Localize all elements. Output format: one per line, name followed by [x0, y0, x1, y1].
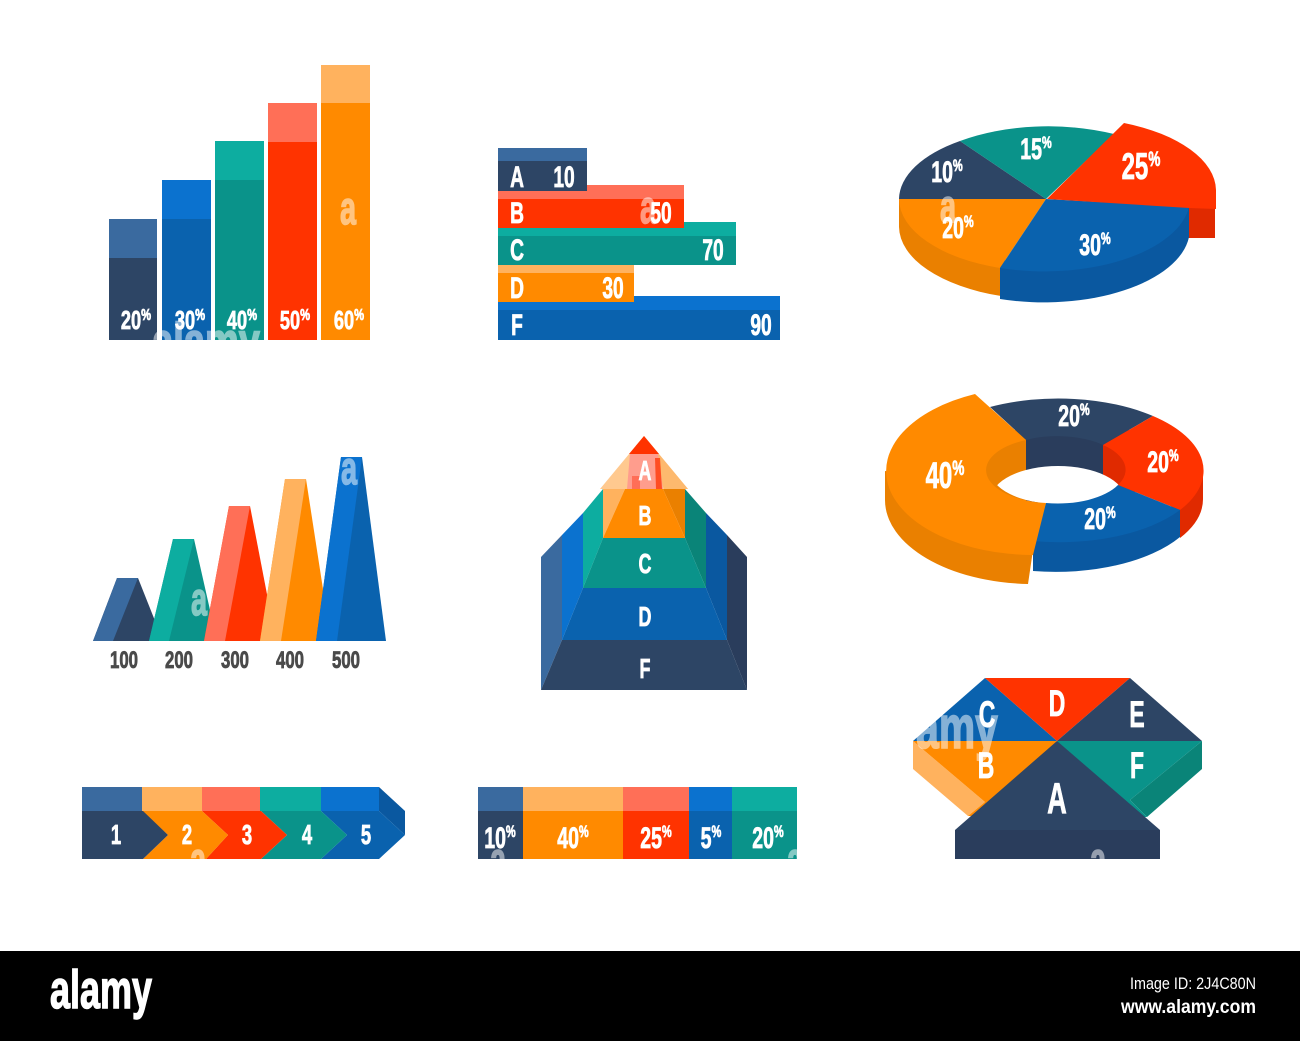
bar B 50: B — [510, 197, 524, 230]
right side face — [1130, 741, 1202, 817]
segment C — [913, 678, 1057, 741]
orange slice side — [899, 199, 1001, 296]
bar A 10: 10 — [553, 161, 575, 194]
orange segment 40% — [886, 394, 1046, 555]
panel: 3D donut chart — [885, 394, 1204, 584]
segment 25% — [623, 787, 689, 859]
bar A 10 — [498, 148, 587, 194]
bar value labels: 40 — [227, 306, 247, 335]
orange segment side — [885, 471, 1033, 584]
pyramid labels: C — [639, 548, 651, 579]
segment A — [955, 741, 1160, 830]
axis labels: 200 — [165, 647, 193, 674]
pie labels: % — [1042, 134, 1052, 153]
left side face — [913, 741, 985, 816]
bar B 50: a — [640, 182, 656, 234]
bar C 70 — [498, 222, 736, 267]
hexagon labels — [978, 682, 1145, 886]
segment 10%: % — [506, 823, 516, 842]
column 400 — [260, 479, 331, 641]
red segment 20% — [1103, 416, 1204, 510]
bar D 30: D — [510, 272, 524, 305]
segment 40% — [523, 787, 623, 859]
blue slice side — [1000, 203, 1189, 302]
column 500 — [316, 457, 386, 641]
website: www.alamy.com — [1120, 997, 1256, 1018]
chevron 1 — [82, 811, 168, 859]
chevron numbers: 5 — [361, 820, 371, 851]
pie labels: 25 — [1122, 146, 1148, 187]
tier C — [583, 489, 706, 588]
watermark on bars — [152, 183, 356, 369]
axis labels: 100 — [110, 647, 138, 674]
panel: 3D pie chart — [899, 123, 1216, 302]
pie labels: % — [964, 213, 974, 232]
watermark on hexagon: amy — [916, 694, 998, 761]
bar 30% — [162, 180, 211, 340]
axis labels: 400 — [276, 647, 304, 674]
bar C 70: C — [510, 234, 524, 267]
bar value labels — [121, 305, 364, 335]
pyramid labels: D — [639, 601, 651, 632]
donut labels: 40 — [926, 455, 952, 496]
segment 5%: 5 — [701, 822, 712, 855]
bar value labels: % — [141, 305, 151, 323]
donut inner wall — [986, 430, 1135, 502]
bar 60% — [321, 65, 370, 340]
blue segment 20% — [1033, 485, 1180, 542]
chevron numbers — [111, 820, 371, 886]
footer band — [0, 951, 1300, 1041]
axis labels — [110, 647, 360, 674]
chevron numbers: 2 — [182, 820, 192, 851]
panel: trapezoid column chart — [93, 443, 386, 674]
hexagon labels: B — [978, 744, 994, 786]
chevron 4 — [261, 811, 347, 859]
bar 20% — [109, 219, 157, 340]
donut labels: % — [1080, 401, 1090, 420]
pie labels: % — [1148, 147, 1161, 171]
chevron 2 — [142, 811, 228, 859]
axis labels: 300 — [221, 647, 249, 674]
bar value labels: 30 — [175, 306, 195, 335]
pie labels: % — [953, 157, 963, 176]
hexagon labels: E — [1129, 693, 1145, 735]
donut labels: 20 — [1058, 400, 1080, 433]
bar value labels: 20 — [121, 306, 141, 335]
segment 25%: % — [662, 823, 672, 842]
tier F — [541, 535, 747, 690]
bar A 10: A — [510, 161, 524, 194]
panel: horizontal bar chart — [498, 148, 780, 342]
hexagon labels: A — [1047, 773, 1067, 823]
segment 40%: 40 — [557, 822, 579, 855]
chevron 5 — [321, 811, 405, 859]
hexagon labels: D — [1049, 682, 1065, 724]
axis labels: 500 — [332, 647, 360, 674]
blue segment side — [1033, 505, 1180, 572]
navy slice 10% — [899, 141, 1046, 199]
red slice side — [1186, 205, 1215, 238]
footer logo: alamy — [50, 960, 152, 1020]
tier A tip — [600, 436, 688, 489]
pie labels: 10 — [931, 156, 953, 189]
segment 20%: a — [787, 834, 803, 886]
bar 50% — [268, 103, 317, 340]
teal slice 15% — [960, 126, 1114, 199]
chevron numbers: 1 — [111, 820, 121, 851]
column 300 — [204, 506, 276, 641]
bar F 90: 90 — [750, 309, 772, 342]
donut labels — [926, 400, 1179, 536]
pyramid labels — [639, 455, 651, 684]
image id: Image ID: 2J4C80N — [1130, 974, 1256, 993]
segment 20%: % — [774, 823, 784, 842]
segment 10%: 10 — [484, 822, 506, 855]
pyramid labels: B — [639, 500, 651, 531]
panel: vertical bar chart — [109, 65, 370, 369]
pie labels: 20 — [942, 212, 964, 245]
navy segment 20% — [990, 399, 1153, 445]
base front face — [955, 830, 1160, 859]
pie labels: 30 — [1079, 229, 1101, 262]
panel: chevron process bar — [82, 787, 405, 886]
orange slice 20% — [899, 199, 1046, 268]
segment B — [913, 741, 1057, 817]
donut labels: % — [952, 456, 965, 480]
chevron 3 — [202, 811, 287, 859]
segment 5% — [689, 787, 732, 859]
panel: segmented percentage bar — [478, 787, 803, 886]
bar D 30: 30 — [602, 272, 624, 305]
donut labels: % — [1169, 447, 1179, 466]
segment F — [1057, 741, 1202, 817]
bar F 90 — [498, 296, 780, 342]
pie labels: 15 — [1020, 133, 1042, 166]
bar B 50 — [498, 182, 684, 234]
bar value labels: % — [195, 305, 205, 323]
column 100 — [93, 578, 163, 641]
chevron numbers: 4 — [302, 820, 313, 851]
segment 40%: % — [579, 823, 589, 842]
segment 20%: 20 — [752, 822, 774, 855]
pie labels: % — [1101, 230, 1111, 249]
segment D — [985, 678, 1130, 741]
pyramid labels: F — [640, 653, 650, 684]
hexagon labels: F — [1130, 744, 1144, 786]
watermarks on columns: a — [341, 443, 357, 495]
donut labels: 20 — [1084, 503, 1106, 536]
bar C 70: 70 — [702, 234, 724, 267]
bar value labels: 50 — [280, 306, 300, 335]
blue slice 30% — [1000, 199, 1189, 271]
donut labels: % — [1106, 504, 1116, 523]
hexagon labels: a — [1090, 834, 1106, 886]
bar value labels: 60 — [334, 306, 354, 335]
column 200 — [149, 539, 217, 641]
bar value labels: % — [300, 305, 310, 323]
watermarks on columns — [191, 443, 357, 626]
segment 5%: % — [712, 823, 722, 842]
bar value labels: % — [247, 305, 257, 323]
tier D — [562, 513, 727, 640]
panel: stepped pyramid — [541, 436, 747, 690]
segment 10%: a — [490, 834, 506, 886]
watermarks on columns: a — [191, 574, 207, 626]
bar value labels: % — [354, 305, 364, 323]
segment 20% — [732, 787, 803, 886]
panel: hexagonal segment diagram — [913, 678, 1202, 886]
pie labels — [931, 133, 1161, 262]
red slice 25% — [1047, 123, 1216, 209]
chevron numbers: a — [190, 834, 206, 886]
top strip — [82, 787, 379, 811]
bar 40% — [215, 141, 264, 340]
segment E — [1057, 678, 1202, 741]
segment 10% — [478, 787, 523, 886]
bar D 30 — [498, 265, 634, 305]
watermark on bars: alamy — [152, 314, 260, 369]
pyramid labels: A — [639, 455, 651, 486]
bar B 50: 50 — [650, 197, 672, 230]
hexagon labels: C — [979, 693, 995, 735]
tier B — [603, 489, 685, 538]
donut labels: 20 — [1147, 446, 1169, 479]
pie labels: a — [940, 181, 956, 233]
chevron numbers: 3 — [242, 820, 252, 851]
segment 25%: 25 — [640, 822, 662, 855]
red segment side — [1170, 470, 1203, 538]
watermark on bars: a — [340, 183, 356, 235]
arrow tip side — [379, 787, 405, 835]
bar F 90: F — [511, 309, 523, 342]
